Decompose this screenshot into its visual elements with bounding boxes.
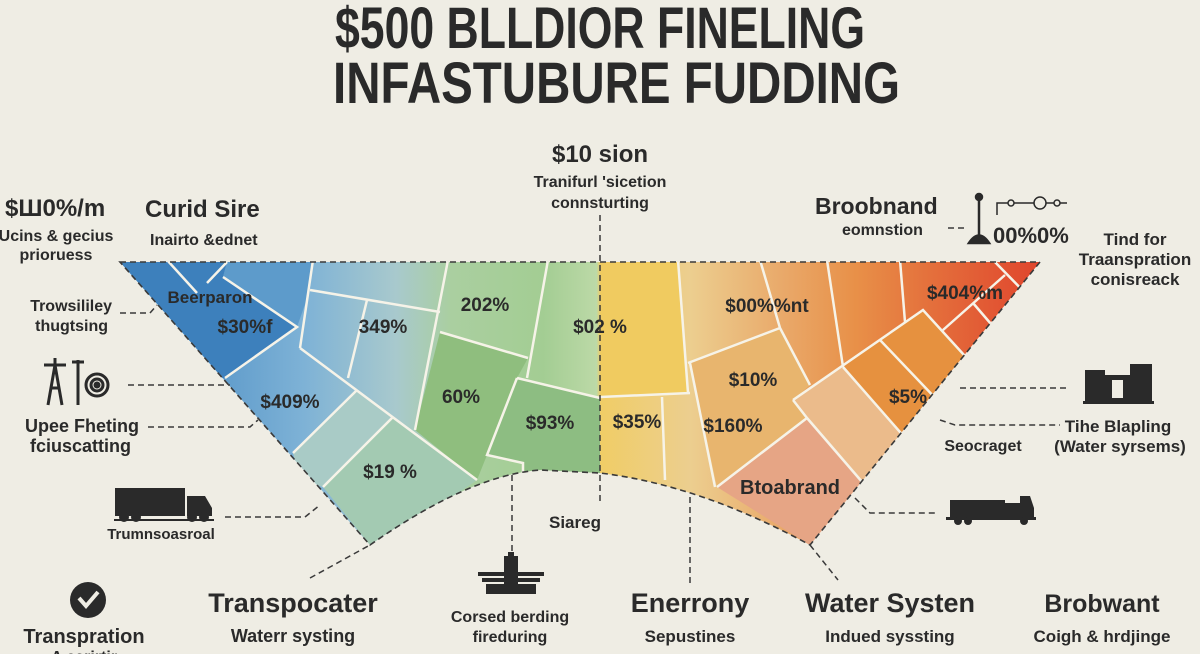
connector lines — [120, 215, 1070, 583]
left top labels: Ucins & gecius — [0, 228, 113, 245]
bottom label: Enerrony — [631, 588, 749, 646]
left top labels — [0, 195, 260, 335]
cell values: $02 % — [573, 317, 627, 338]
bottom label: Water Systen: Indued syssting — [825, 627, 955, 646]
center callout: Tranifurl 'sicetion — [534, 174, 666, 191]
center callout — [534, 141, 666, 212]
label: Tind for: Tind for — [1104, 230, 1167, 249]
label: Tind for: conisreack — [1091, 270, 1180, 289]
icon: pin and chain — [969, 194, 1067, 243]
bottom label: Corsed berding: Corsed berding — [451, 609, 569, 626]
left top labels: $Ш0%/m — [5, 195, 105, 222]
label: truck: Trumnsoasroal — [107, 526, 215, 543]
bottom label: Corsed berding — [451, 609, 569, 646]
label: Tihe Blapling: (Water syrsems) — [1054, 437, 1186, 456]
cell values: 60% — [442, 387, 480, 408]
cell values: $5% — [889, 387, 927, 408]
label: Broobnand: eomnstion — [842, 222, 923, 239]
center callout: $10 sion — [552, 141, 648, 168]
left top labels: Curid Sire — [145, 196, 260, 223]
label: Seocraget: Seocraget — [944, 438, 1022, 455]
icon: truck right — [946, 496, 1036, 525]
label: Broobnand — [815, 193, 938, 239]
cell values: 202% — [461, 295, 509, 316]
label: Tind for — [1079, 230, 1191, 289]
cell values: $35% — [613, 412, 661, 433]
bottom label: Brobwant: Coigh & hrdjinge — [1034, 627, 1170, 646]
label: Tihe Blapling — [1054, 417, 1186, 456]
left top labels: Trowsililey — [30, 298, 112, 315]
bottom label: Enerrony: Sepustines — [645, 627, 735, 646]
center callout: connsturting — [551, 195, 649, 212]
cell values: $10% — [729, 370, 777, 391]
title: INFASTUBURE FUDDING — [333, 51, 900, 116]
left top labels: Inairto &ednet — [150, 232, 258, 249]
bottom label: Corsed berding: fireduring — [473, 629, 547, 646]
icon: circle badge — [70, 582, 106, 618]
bottom label: Water Systen: Water Systen — [805, 588, 975, 618]
title — [333, 0, 900, 116]
icon: truck left — [114, 488, 214, 522]
bottom label: Transpocater: Transpocater — [208, 588, 378, 618]
cell values: 349% — [359, 317, 407, 338]
label: Tihe Blapling: Tihe Blapling — [1065, 417, 1171, 436]
bottom label: Transpration: Transpration — [23, 626, 145, 648]
label: Upee Fheting — [25, 416, 139, 456]
left top labels: thugtsing — [35, 318, 108, 335]
label: Siareg: Siareg — [549, 513, 601, 532]
left top labels: prioruess — [20, 247, 93, 264]
label: 00%0%: 00%0% — [993, 223, 1069, 248]
bottom label: Brobwant: Brobwant — [1044, 590, 1160, 618]
cell values: $30%f — [218, 317, 273, 338]
bottom label: Brobwant — [1034, 590, 1170, 646]
cell values: $00%%nt — [725, 296, 809, 317]
icon: tower and coil — [44, 358, 108, 405]
cell values: $404%m — [927, 283, 1003, 304]
bottom label: Transpocater — [208, 588, 378, 646]
cell values: $93% — [526, 413, 574, 434]
cell values: $19 % — [363, 462, 417, 483]
label: Tind for: Traanspration — [1079, 250, 1191, 269]
icon: factory — [478, 552, 544, 594]
cell values: Beerparon — [167, 288, 253, 307]
label: Upee Fheting: Upee Fheting — [25, 416, 139, 436]
bottom label: Water Systen — [805, 588, 975, 646]
label: Broobnand: Broobnand — [815, 193, 938, 219]
cell values: $160% — [703, 416, 763, 437]
chart: funding funnel — [110, 250, 1050, 550]
cell values: Btoabrand — [740, 477, 840, 499]
cell values — [167, 283, 1003, 499]
label: Upee Fheting: fciuscatting — [30, 436, 131, 456]
icon: building right — [1083, 364, 1154, 404]
bottom label: Enerrony: Enerrony — [631, 588, 749, 618]
bottom label: Transpocater: Waterr systing — [231, 626, 355, 646]
cell values: $409% — [260, 392, 320, 413]
